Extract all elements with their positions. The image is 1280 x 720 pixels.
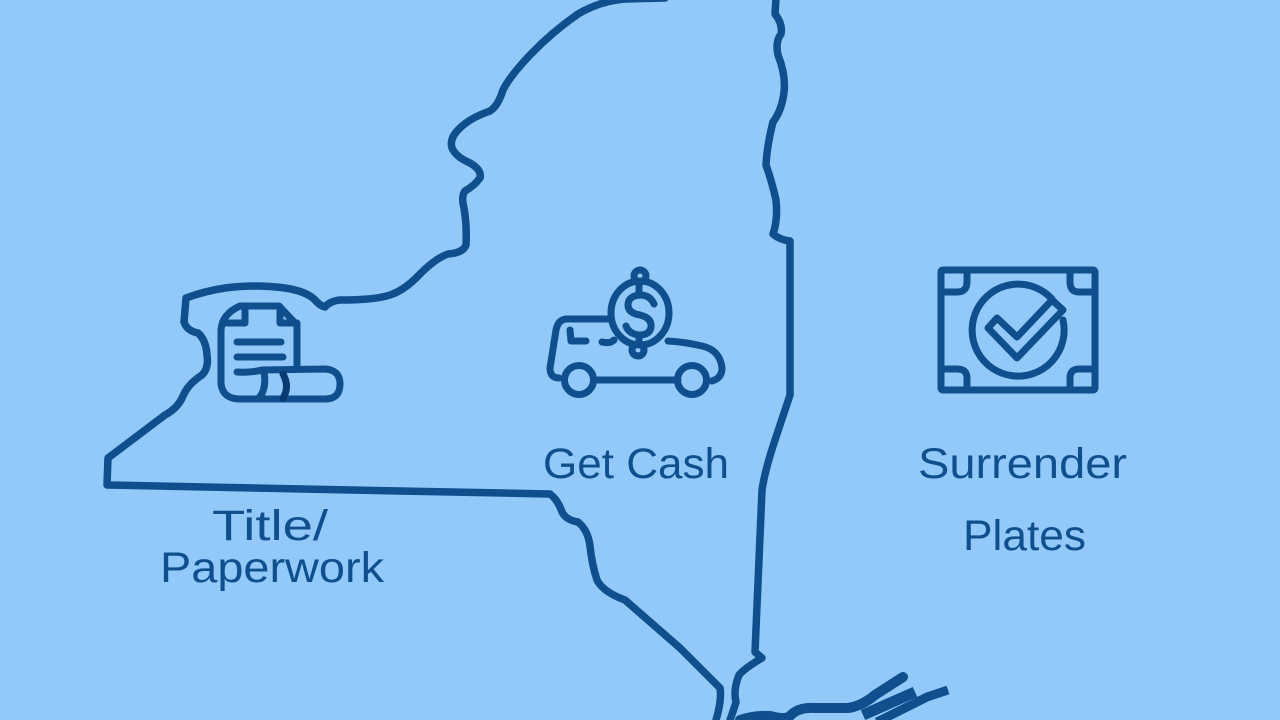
dollar sign — [626, 295, 654, 335]
label: Title/Paperwork: Title/ — [212, 502, 328, 550]
label: Surrender Plates — [918, 440, 1127, 560]
label: Title/Paperwork — [160, 502, 385, 592]
icon: car with dollar coin — [550, 270, 722, 394]
label: Surrender Plates: Surrender — [918, 440, 1127, 488]
state outline map — [107, 0, 948, 720]
icon: paperwork document with scroll — [221, 306, 340, 399]
label: Get Cash: Get Cash — [543, 440, 729, 488]
label: Title/Paperwork: Paperwork — [160, 544, 385, 592]
icon: plate with check mark — [941, 270, 1095, 390]
label: Surrender Plates: Plates — [963, 512, 1086, 560]
